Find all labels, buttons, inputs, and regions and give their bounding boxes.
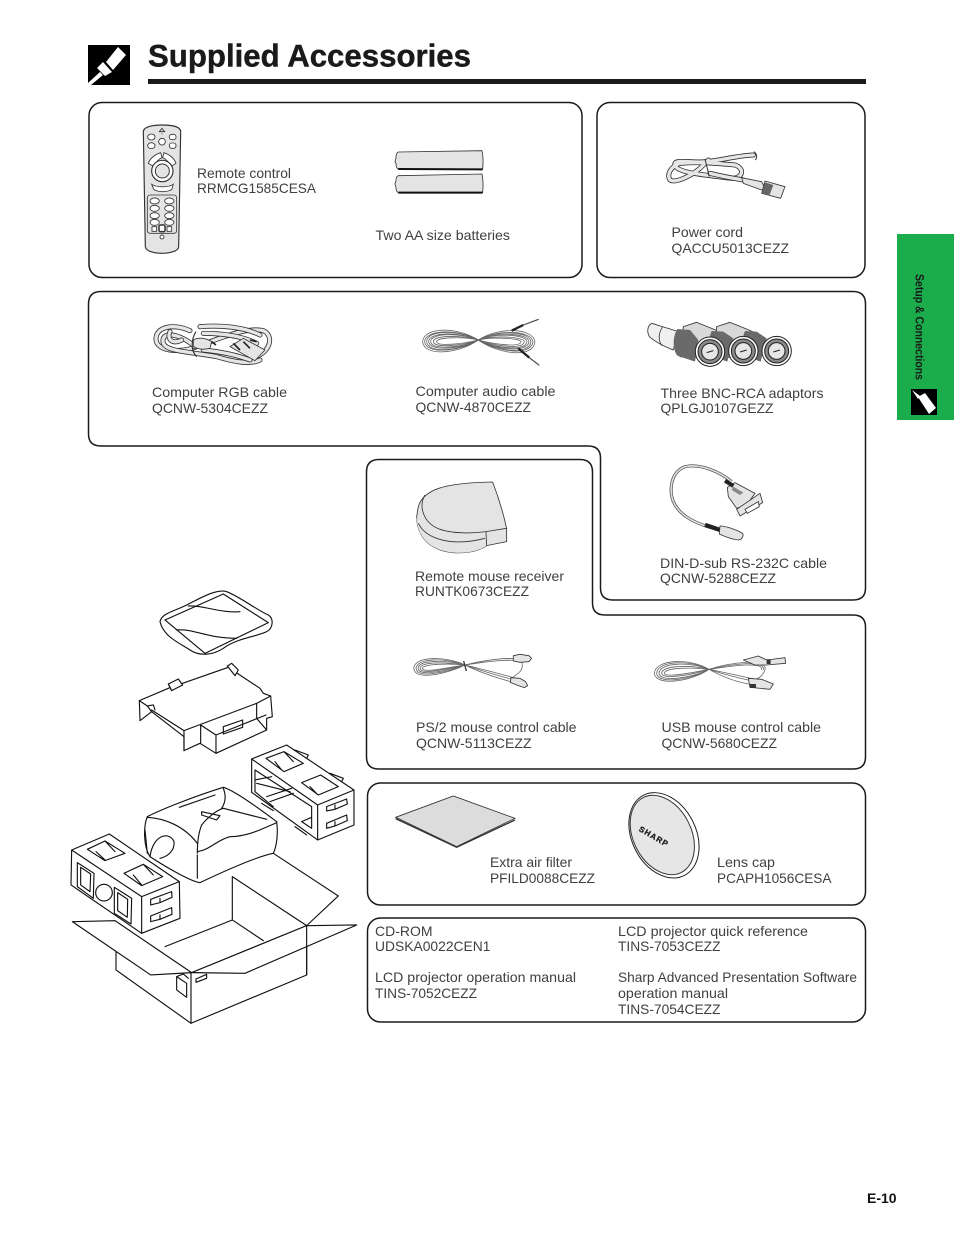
panel: mouse cables group: [366, 460, 866, 769]
text: computer audio cable: QCNW-4870CEZZ: [416, 399, 531, 415]
text: remote control: Remote control: [197, 165, 291, 181]
text: remote mouse receiver: RUNTK0673CEZZ: [415, 583, 529, 599]
page header: [88, 38, 866, 85]
text: lens cap: [717, 854, 832, 886]
text: air filter: Extra air filter: [490, 854, 572, 870]
text: computer RGB cable: Computer RGB cable: [152, 384, 287, 400]
icon: computer audio cable: [423, 319, 539, 365]
tab label: Setup & Connections: [912, 274, 924, 380]
text: computer RGB cable: QCNW-5304CEZZ: [152, 400, 268, 416]
icon: remote control: [143, 125, 181, 253]
text: computer audio cable: Computer audio cable: [416, 383, 556, 399]
text: presentation software manual: Sharp Advanced Presentation Software: [618, 969, 857, 985]
text: power cord: Power cord: [672, 224, 743, 240]
text: CD-ROM: CD-ROM: [375, 923, 432, 939]
text: operation manual: [375, 969, 576, 1001]
icon: power cord: [669, 152, 785, 198]
icon: three BNC-RCA adaptors: [648, 322, 791, 366]
panel: power cord: [597, 102, 865, 278]
text: air filter: PFILD0088CEZZ: [490, 870, 595, 886]
text: USB cable: USB mouse control cable: [662, 719, 821, 735]
panel: remote control and batteries: [89, 102, 582, 278]
text: batteries: Two AA size batteries: [376, 227, 510, 243]
text: BNC-RCA adaptors: QPLGJ0107GEZZ: [660, 400, 774, 416]
icon: PS/2 mouse control cable: [414, 654, 532, 688]
text: lens cap: Lens cap: [717, 854, 775, 870]
text: DIN-D-sub cable: QCNW-5288CEZZ: [660, 570, 776, 586]
icon: left foam cushion: [71, 834, 180, 933]
text: operation manual: LCD projector operation manual: [375, 969, 576, 985]
icon: computer RGB cable: [156, 326, 270, 362]
text: remote control: RRMCG1585CESA: [197, 180, 317, 196]
icon: connector plug: [88, 45, 130, 85]
text: computer audio cable: [416, 383, 556, 415]
text: CD-ROM: [375, 923, 491, 954]
icon: USB mouse control cable: [654, 656, 786, 689]
text: USB cable: [662, 719, 821, 751]
text: BNC-RCA adaptors: [660, 385, 824, 416]
panel: cables and adaptors group: [88, 292, 866, 600]
text: remote mouse receiver: Remote mouse receiver: [415, 568, 564, 584]
icon: open cardboard box: [72, 853, 357, 1023]
text: PS/2 cable: [416, 719, 577, 751]
text: operation manual: TINS-7052CEZZ: [375, 985, 477, 1001]
text: quick reference: [618, 923, 808, 954]
text: CD-ROM: UDSKA0022CEN1: [375, 938, 491, 954]
text: quick reference: LCD projector quick reference: [618, 923, 808, 939]
text: presentation software manual: operation manual: [618, 985, 728, 1001]
text: power cord: [672, 224, 789, 256]
text: BNC-RCA adaptors: Three BNC-RCA adaptors: [660, 385, 824, 401]
text: remote mouse receiver: [415, 568, 564, 599]
panel: documents and software: [368, 918, 866, 1022]
text: PS/2 cable: PS/2 mouse control cable: [416, 719, 577, 735]
title: Supplied Accessories: [148, 38, 471, 74]
text: DIN-D-sub cable: [660, 555, 827, 586]
text: presentation software manual: [618, 969, 857, 1017]
side tab: Setup & Connections: [897, 234, 954, 420]
icon: DIN-D-sub RS-232C cable: [671, 466, 763, 540]
icon: AA batteries: [395, 151, 483, 193]
icon: cardboard tray: [139, 663, 272, 753]
text: presentation software manual: TINS-7054CEZZ: [618, 1001, 721, 1017]
title rule: [148, 79, 866, 84]
text: USB cable: QCNW-5680CEZZ: [662, 735, 777, 751]
icon: bagged filter cover: [160, 591, 272, 654]
panel: air filter and lens cap: [368, 781, 866, 905]
text: PS/2 cable: QCNW-5113CEZZ: [416, 735, 532, 751]
illustration: packing box with projector and accessories: [71, 591, 357, 1023]
text: air filter: [490, 854, 595, 886]
icon: lens cap: [615, 781, 713, 890]
text: quick reference: TINS-7053CEZZ: [618, 938, 721, 954]
icon: remote mouse receiver: [417, 482, 507, 553]
page number: E-10: [867, 1190, 897, 1206]
icon: air filter: [396, 796, 515, 847]
icon: connector plug small: [911, 389, 937, 415]
text: power cord: QACCU5013CEZZ: [672, 240, 789, 256]
text: remote control: [197, 165, 317, 196]
icon: bagged projector: [145, 787, 277, 883]
text: lens cap: PCAPH1056CESA: [717, 870, 832, 886]
text: computer RGB cable: [152, 384, 287, 416]
text: DIN-D-sub cable: DIN-D-sub RS-232C cable: [660, 555, 827, 571]
brand mark: SHARP: [637, 825, 670, 849]
icon: right foam cushion: [252, 745, 354, 840]
